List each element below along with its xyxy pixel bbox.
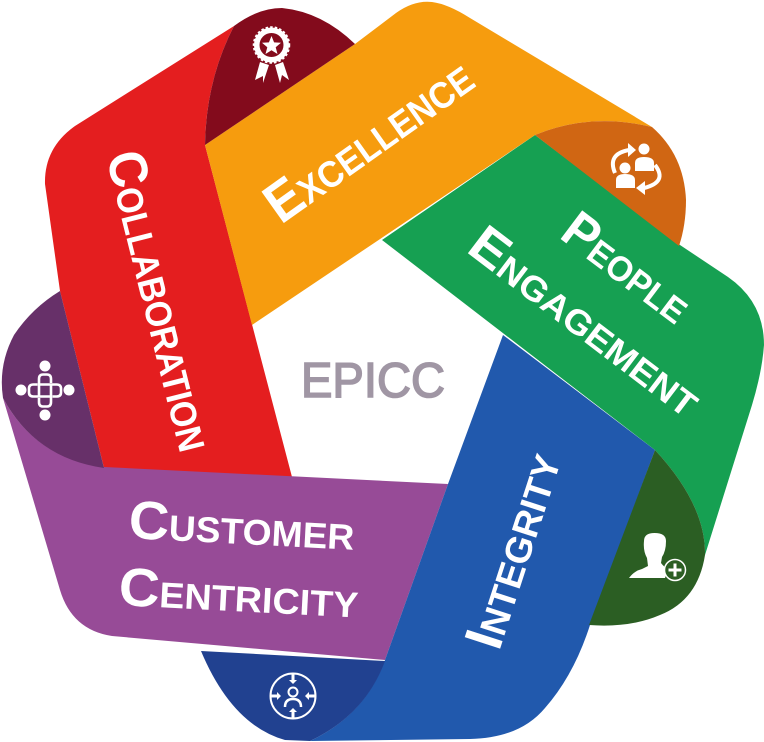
panel: dark blue tab with focus icon (201, 651, 385, 741)
panel: people engagement band (382, 135, 764, 555)
icon: people exchange (613, 143, 660, 195)
icon: award ribbon (254, 28, 289, 83)
people label: PEOPLE (551, 200, 703, 335)
excellence label: EXCELLENCE (251, 44, 484, 235)
panel: collaboration band (45, 26, 292, 477)
panel: excellence band (205, 2, 652, 325)
collaboration label: COLLABORATION (94, 144, 227, 457)
customer label: CUSTOMER (127, 490, 356, 562)
panel: integrity band (310, 335, 655, 741)
panel: customer centricity band (3, 398, 448, 660)
icon: person in target (270, 674, 316, 718)
panel: dark red tab with award icon (205, 8, 355, 145)
panel: dark green tab with add-person icon (589, 450, 705, 626)
panel: dark purple tab with collaboration icon (2, 291, 104, 468)
icon: add person (629, 533, 686, 580)
panel: dark orange tab with people exchange icon (535, 121, 686, 246)
centricity label: CENTRICITY (117, 557, 360, 630)
center title: EPICC (301, 354, 445, 408)
integrity label: INTEGRITY (453, 445, 573, 656)
engagement label: ENGAGEMENT (458, 214, 713, 428)
icon: linked people (16, 360, 74, 420)
